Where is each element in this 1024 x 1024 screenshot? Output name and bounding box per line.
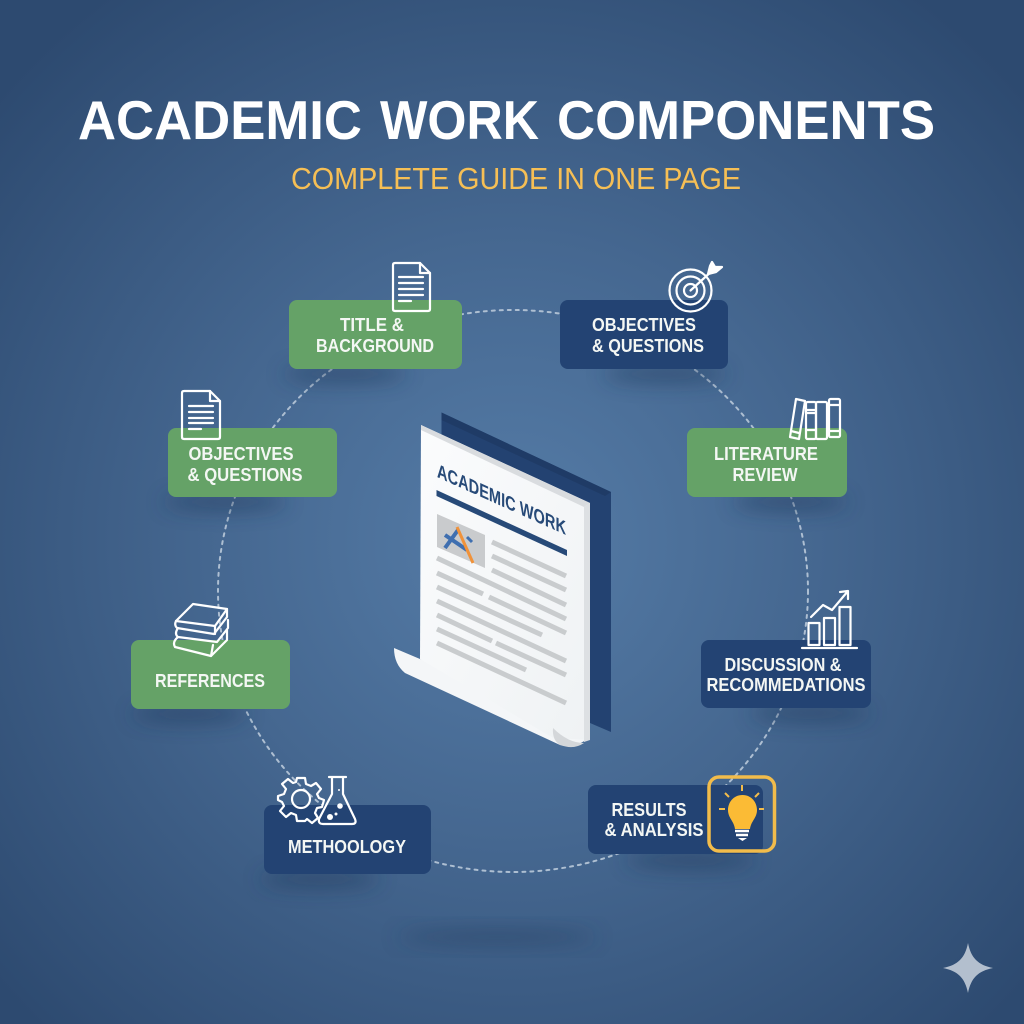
icon: target bbox=[670, 262, 722, 312]
icon: document bbox=[393, 263, 430, 311]
card: objectives & questions (green): OBJECTIVES bbox=[188, 444, 294, 464]
icon: stack of books bbox=[174, 604, 228, 656]
corner curl bbox=[553, 728, 584, 747]
card: objectives & questions (navy): & QUESTIONS bbox=[592, 336, 704, 356]
dotted cycle ring bbox=[218, 310, 808, 872]
card: discussion & recommendations bbox=[701, 591, 871, 708]
card: objectives & questions (green) bbox=[168, 391, 337, 497]
title: ACADEMIC bbox=[78, 89, 362, 151]
card shadows bbox=[132, 366, 870, 887]
card: literature review bbox=[687, 399, 847, 497]
icon: bar chart with arrow bbox=[802, 591, 857, 648]
document text lines bbox=[437, 542, 566, 703]
title bbox=[78, 89, 935, 151]
card: objectives & questions (green): & QUESTIONS bbox=[188, 465, 302, 485]
card: references: REFERENCES bbox=[155, 671, 265, 691]
card: literature review: REVIEW bbox=[732, 465, 798, 485]
card: methodology bbox=[264, 777, 431, 874]
card: results & analysis: RESULTS bbox=[612, 800, 686, 820]
card: objectives & questions (navy) bbox=[560, 262, 728, 369]
right bevel bbox=[584, 503, 590, 742]
top bevel bbox=[421, 425, 590, 507]
cover top band bbox=[442, 412, 611, 496]
icon: gear and flask bbox=[278, 777, 356, 824]
card: title & background: TITLE & bbox=[340, 315, 404, 335]
card: title & background bbox=[289, 263, 462, 369]
central document illustration bbox=[394, 412, 611, 747]
card: objectives & questions (navy): OBJECTIVES bbox=[592, 315, 696, 335]
icon: lightbulb in yellow frame bbox=[709, 777, 774, 851]
document picture bbox=[437, 514, 485, 568]
card: title & background: BACKGROUND bbox=[316, 336, 434, 356]
card: references bbox=[131, 604, 290, 709]
subtitle: COMPLETE GUIDE IN ONE PAGE bbox=[291, 162, 741, 196]
back cover bbox=[442, 412, 611, 732]
icon: document bbox=[182, 391, 220, 439]
title: WORK bbox=[380, 89, 539, 151]
heading rule bbox=[436, 490, 567, 556]
document heading: ACADEMIC WORK bbox=[437, 460, 566, 540]
card: literature review: LITERATURE bbox=[714, 444, 818, 464]
card: results & analysis: & ANALYSIS bbox=[604, 820, 704, 840]
ground shadow bbox=[397, 930, 597, 944]
card: discussion & recommendations: RECOMMEDATIONS bbox=[706, 675, 866, 695]
page sheet bbox=[420, 425, 590, 740]
card: discussion & recommendations: DISCUSSION & bbox=[724, 655, 842, 675]
card: methodology: METHOOLOGY bbox=[288, 837, 406, 857]
card: results & analysis bbox=[588, 777, 774, 854]
icon: books on shelf bbox=[790, 399, 840, 439]
icon: sparkle watermark bbox=[943, 943, 993, 993]
paper curl bbox=[394, 648, 590, 747]
title: COMPONENTS bbox=[557, 89, 935, 151]
